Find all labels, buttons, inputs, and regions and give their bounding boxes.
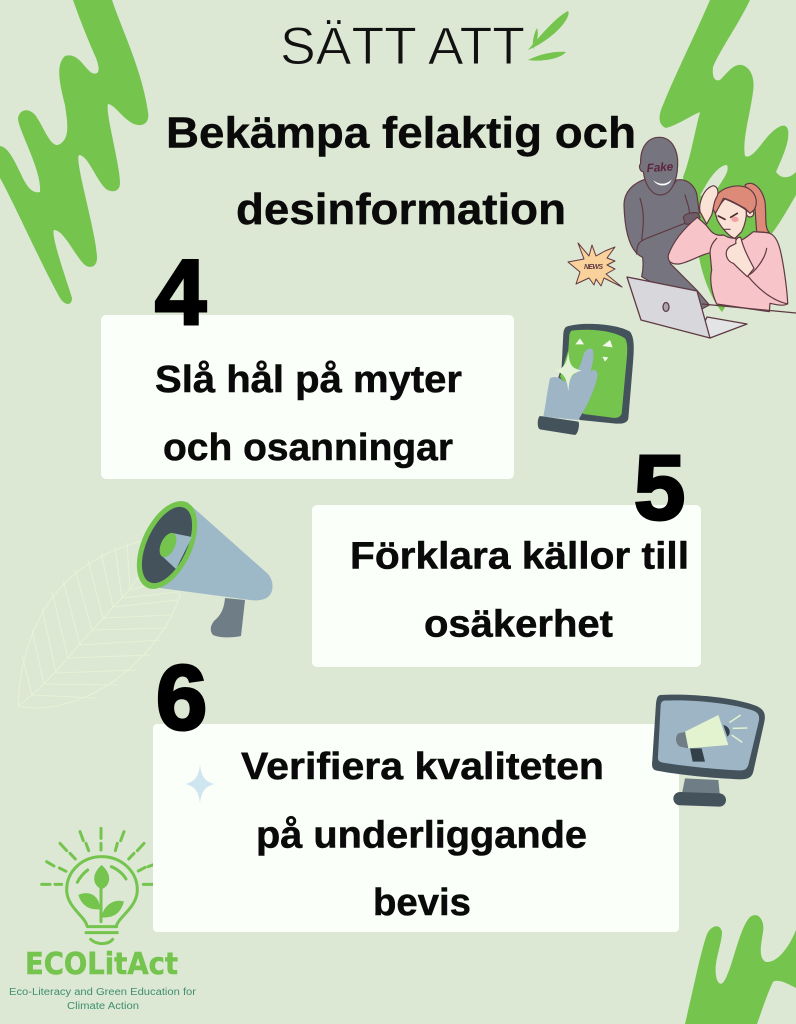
heading bbox=[166, 108, 636, 234]
logo tagline bbox=[9, 987, 197, 1012]
panel: card 3: på underliggande bbox=[256, 814, 587, 856]
panel: card 1: Slå hål på myter bbox=[155, 359, 462, 401]
table edge bbox=[702, 304, 796, 313]
heading: desinformation bbox=[236, 185, 566, 234]
man in grey bbox=[624, 137, 709, 310]
decorative green blob: bottom right bbox=[685, 915, 796, 1024]
icon: news burst bbox=[568, 243, 622, 287]
logo tagline: Eco-Literacy and Green Education for bbox=[9, 987, 197, 998]
panel: card 3 bbox=[153, 724, 679, 932]
Fake label: Fake bbox=[646, 159, 674, 175]
panel: card 2 bbox=[312, 505, 701, 667]
icon: light bulb with plant bbox=[42, 828, 157, 944]
woman chin hand bbox=[726, 237, 754, 277]
woman ponytail bbox=[745, 183, 769, 233]
icon: tablet with pointing hand bbox=[538, 324, 634, 435]
decorative green blob: top right bbox=[660, 0, 796, 312]
icon: sparkle bbox=[185, 764, 215, 804]
logo name: ECOLitAct bbox=[25, 947, 178, 982]
icon: megaphone bbox=[124, 492, 272, 637]
number 6: 6 bbox=[156, 647, 207, 749]
woman body bbox=[668, 217, 788, 312]
heading: Bekämpa felaktig och bbox=[166, 108, 636, 158]
panel: card 1 bbox=[101, 315, 514, 479]
NEWS label: NEWS bbox=[584, 264, 603, 271]
number 5: 5 bbox=[634, 437, 685, 539]
icon: monitor with megaphone bbox=[652, 695, 765, 807]
title leaf accents bbox=[528, 11, 569, 61]
number 4: 4 bbox=[155, 242, 206, 344]
panel: card 3: bevis bbox=[373, 882, 471, 924]
woman face bbox=[715, 199, 746, 238]
logo: EcoLitAct bbox=[9, 828, 197, 1012]
title: SÄTT ATT bbox=[280, 17, 525, 76]
logo tagline: Climate Action bbox=[67, 1001, 139, 1012]
leaf watermark bbox=[18, 541, 180, 708]
laptop bbox=[627, 277, 747, 338]
panel: card 2: osäkerhet bbox=[424, 604, 613, 646]
woman hair bbox=[713, 186, 756, 213]
woman raised hand bbox=[700, 186, 718, 224]
panel: card 3: Verifiera kvaliteten bbox=[241, 746, 604, 788]
panel: card 1: och osanningar bbox=[163, 427, 453, 469]
decorative green blob: top left bbox=[0, 0, 148, 304]
illustration: fake news man and worried woman at laptop bbox=[624, 137, 796, 338]
panel: card 2: Förklara källor till bbox=[350, 536, 689, 578]
